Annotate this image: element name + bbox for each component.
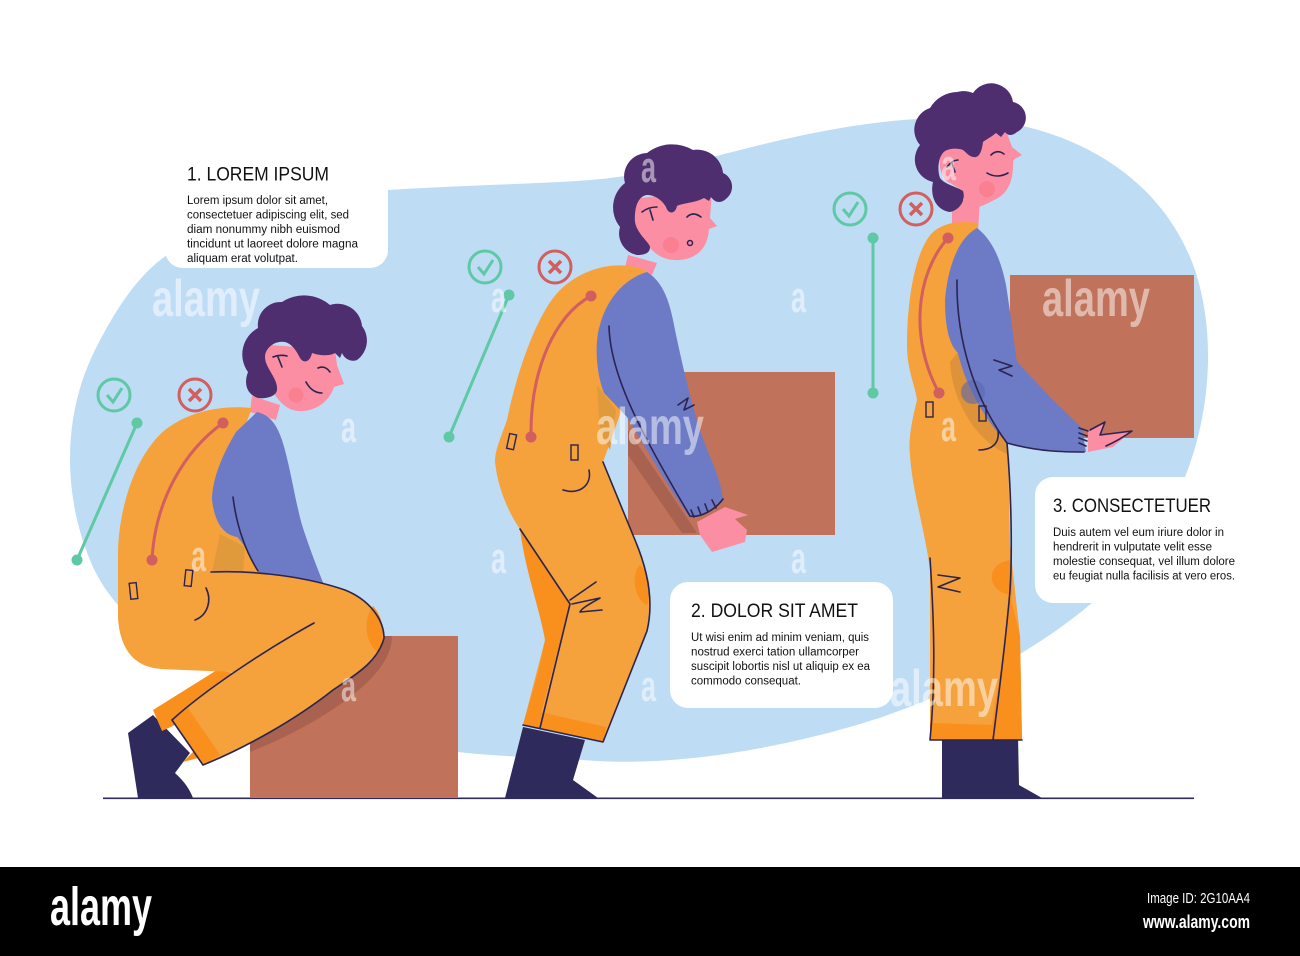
label 3: 3. CONSECTETUER [1053,496,1211,517]
spine: correct [72,418,142,566]
footer bar: alamy [50,877,152,937]
label 2: suscipit lobortis nisl ut aliquip ex ea [691,661,871,673]
sweater [212,412,326,590]
icon: cross [900,193,932,225]
figure 3: standing, straight back [834,83,1132,798]
torso and apron [907,222,1022,740]
icon: check [98,379,130,411]
cuff [172,708,220,765]
knee patch [635,565,650,605]
label 3: hendrerit in vulputate velit esse [1053,542,1212,554]
watermarks: a [941,402,956,451]
spine: correct [444,290,514,442]
label 1: Lorem ipsum dolor sit amet, [187,195,328,207]
back trouser leg [153,670,245,762]
dark trouser strip [930,595,1022,740]
knee patch [367,606,383,652]
watermarks: a [341,403,356,452]
dark back-of-leg [520,529,570,728]
watermarks: a [791,534,806,583]
outlines [609,326,723,516]
label 3 [1035,477,1300,603]
label 1: 1. LOREM IPSUM [187,164,329,186]
footer bar: Image ID: 2G10AA4 [1147,890,1250,907]
leg outlines [172,572,384,765]
label 1: diam nonummy nibh euismod [187,224,340,236]
watermarks: a [641,143,656,192]
label 1: consectetuer adipiscing elit, sed [187,210,349,222]
hand [1088,422,1132,452]
pockets [129,583,138,599]
watermarks: alamy [596,398,704,456]
watermarks: a [941,141,956,190]
watermarks: a [491,273,506,322]
icon: cross [539,251,571,283]
head 2 [613,144,732,260]
label 2: commodo consequat. [691,676,801,688]
torso shadow [212,534,245,572]
sleeve [597,272,723,518]
label 1 [165,150,388,268]
watermarks: a [791,273,806,322]
spine: wrong [920,232,954,398]
boots [942,735,1042,798]
pockets [507,434,517,450]
watermarks: alamy [152,270,260,328]
watermarks: alamy [890,660,998,718]
neck [625,255,657,275]
outlines [957,280,1011,740]
torso [118,407,262,669]
background blob [70,118,1208,762]
body shadow [950,350,1008,454]
boots [128,715,193,798]
spine: wrong [146,418,228,566]
head 1 [242,295,367,411]
watermarks: a [341,662,356,711]
front leg [160,572,384,765]
label 3: Duis autem vel eum iriure dolor in [1053,527,1224,539]
neck [250,396,280,420]
watermarks [152,141,1150,718]
ground line [103,798,1194,799]
box 3 [1010,275,1194,438]
torso shadow [597,385,616,450]
label 1: tincidunt ut laoreet dolore magna [187,238,359,250]
label 2 [670,582,893,708]
icon: cross [179,379,211,411]
box 2 [628,372,835,535]
label 3: molestie consequat, vel illum dolore [1053,556,1235,568]
hand [697,507,748,552]
label 2: Ut wisi enim ad minim veniam, quis [691,632,869,644]
head 3 [914,83,1026,212]
boots [505,727,598,798]
box 1 [250,636,458,798]
icon: check [469,251,501,283]
neck [952,200,980,232]
watermarks: a [491,534,506,583]
shadow on box [250,636,392,752]
spine: correct [868,232,878,398]
torso and leg [495,265,649,742]
watermarks: alamy [1042,270,1150,328]
spine: wrong [526,290,596,442]
pockets [926,402,933,417]
shadow on box [628,430,697,533]
label 2: 2. DOLOR SIT AMET [691,601,858,622]
watermarks: a [641,662,656,711]
sleeve shadow spot [961,380,985,404]
sleeve [945,228,1086,452]
footer bar [0,867,1300,956]
icon: check [834,193,866,225]
knee patch [992,560,1012,595]
watermarks: a [191,532,206,581]
label 3: eu feugiat nulla facilisis at vero eros. [1053,570,1235,582]
footer bar: www.alamy.com [1142,912,1250,932]
figure 2: bending, rounded back [444,144,748,798]
label 1: aliquam erat volutpat. [187,253,298,265]
label 2: nostrud exerci tation ullamcorper [691,646,859,658]
